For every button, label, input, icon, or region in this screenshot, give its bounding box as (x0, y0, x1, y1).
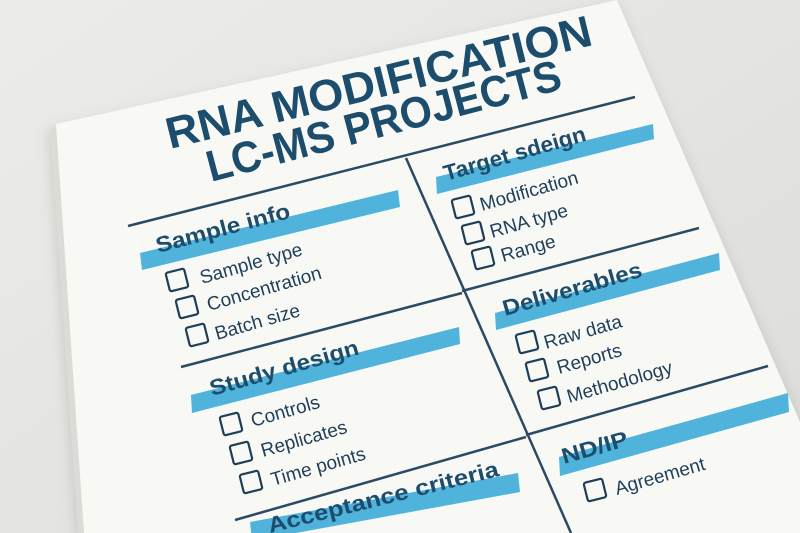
section headings: Target sdeign (440, 121, 589, 186)
checklist items: Reports (555, 340, 624, 379)
checklist items: Modification (478, 168, 581, 216)
highlight bars (140, 124, 789, 533)
checklist items: Controls (249, 392, 322, 432)
section headings: Study design (207, 335, 362, 401)
section headings: Deliverables (499, 257, 645, 321)
checklist items: Time points (269, 444, 368, 491)
checkboxes (165, 195, 607, 502)
checklist items: Methodology (565, 357, 675, 408)
section headings: Sample info (153, 198, 293, 258)
section headings: ND/IP (558, 426, 631, 469)
checklist items (198, 168, 708, 500)
checklist items: Concentration (205, 263, 324, 316)
section headings (153, 121, 645, 533)
title: LC-MS PROJECTS (201, 51, 566, 192)
checklist items: Agreement (613, 454, 708, 500)
divider lines (128, 97, 768, 533)
checklist items: Range (499, 231, 558, 267)
title: RNA MODIFICATION (161, 7, 597, 159)
checklist items: Batch size (213, 300, 303, 345)
checklist items: Replicates (259, 417, 350, 462)
checklist items: Sample type (198, 240, 305, 289)
checklist items: Raw data (542, 311, 625, 354)
checklist items: RNA type (488, 200, 571, 243)
